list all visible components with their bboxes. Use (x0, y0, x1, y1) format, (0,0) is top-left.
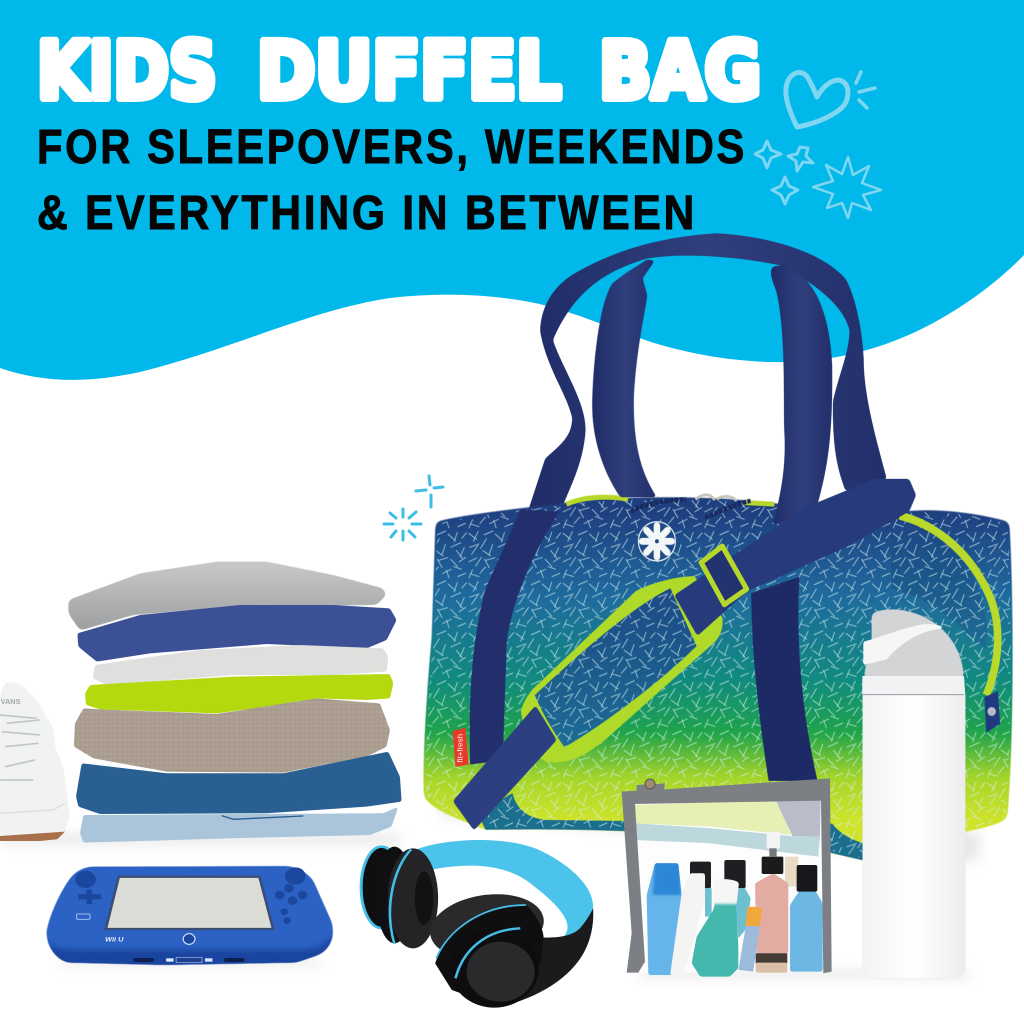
subtitle line 1: FOR SLEEPOVERS, WEEKENDS (37, 121, 747, 174)
water bottle (862, 609, 965, 978)
dark denim (76, 752, 402, 814)
title: KIDS (37, 27, 217, 117)
side zipper (900, 516, 998, 695)
right cup (424, 887, 550, 1008)
light denim (80, 807, 398, 843)
shoe brand: VANS (1, 697, 21, 706)
left cup (361, 847, 438, 948)
title: DUFFEL (257, 27, 561, 117)
duffel bag (423, 233, 1013, 860)
title (37, 27, 761, 117)
top zipper trim (566, 497, 774, 504)
rear handle loop (528, 233, 887, 516)
cotton swabs (785, 857, 798, 887)
silver zipper pull (695, 495, 737, 501)
white shirt (93, 645, 388, 685)
icon: sparkle doodle (384, 476, 443, 540)
front pocket trim (521, 576, 723, 762)
logo badge (638, 522, 675, 561)
console screen (106, 877, 273, 929)
icon: heart and stars doodle (755, 72, 881, 218)
bag texture (425, 499, 1011, 858)
lip balm (738, 907, 762, 972)
right strap on bag (751, 577, 818, 781)
right arm (504, 908, 593, 1005)
title: BAG (599, 27, 761, 117)
right blue bottle (790, 865, 823, 972)
red tag: fit+fresh (456, 734, 464, 762)
headphones (361, 840, 593, 1008)
pouch frame (622, 778, 832, 973)
folded clothes stack (68, 562, 402, 843)
console wordmark: Wii U (105, 937, 124, 943)
front pocket flap (535, 588, 697, 747)
grey sweater (68, 562, 387, 631)
shoulder strap lower (453, 705, 557, 831)
game console (46, 866, 333, 965)
bag body (423, 497, 1013, 860)
red tag (453, 728, 469, 767)
tan sweater (74, 698, 390, 773)
snap rivet (645, 779, 655, 789)
spray bottle (755, 832, 788, 973)
zipper tab (984, 691, 1000, 733)
right side flap (892, 531, 987, 650)
buckle (701, 546, 747, 605)
subtitle line 2: & EVERYTHING IN BETWEEN (37, 187, 697, 240)
black caps (690, 860, 746, 888)
console body (46, 866, 333, 965)
tube (670, 873, 705, 976)
bottom navy band (478, 793, 865, 860)
blue wave header (0, 0, 1024, 380)
shoulder strap upper (674, 479, 916, 636)
lime shirt (85, 674, 393, 713)
clear toiletry pouch (622, 778, 832, 977)
inner handle left (592, 259, 657, 497)
pouch window (633, 792, 823, 973)
teal bottles (705, 888, 751, 938)
floor shadows (0, 785, 980, 978)
navy sweater (77, 605, 397, 662)
shoe (0, 682, 70, 841)
left strap on bag (470, 509, 559, 764)
blue bottle (647, 863, 682, 975)
inner handle right (771, 265, 832, 526)
denim tag (222, 816, 303, 819)
headband (415, 840, 593, 937)
zipper pull cords (631, 499, 751, 518)
mouthwash (692, 879, 739, 977)
